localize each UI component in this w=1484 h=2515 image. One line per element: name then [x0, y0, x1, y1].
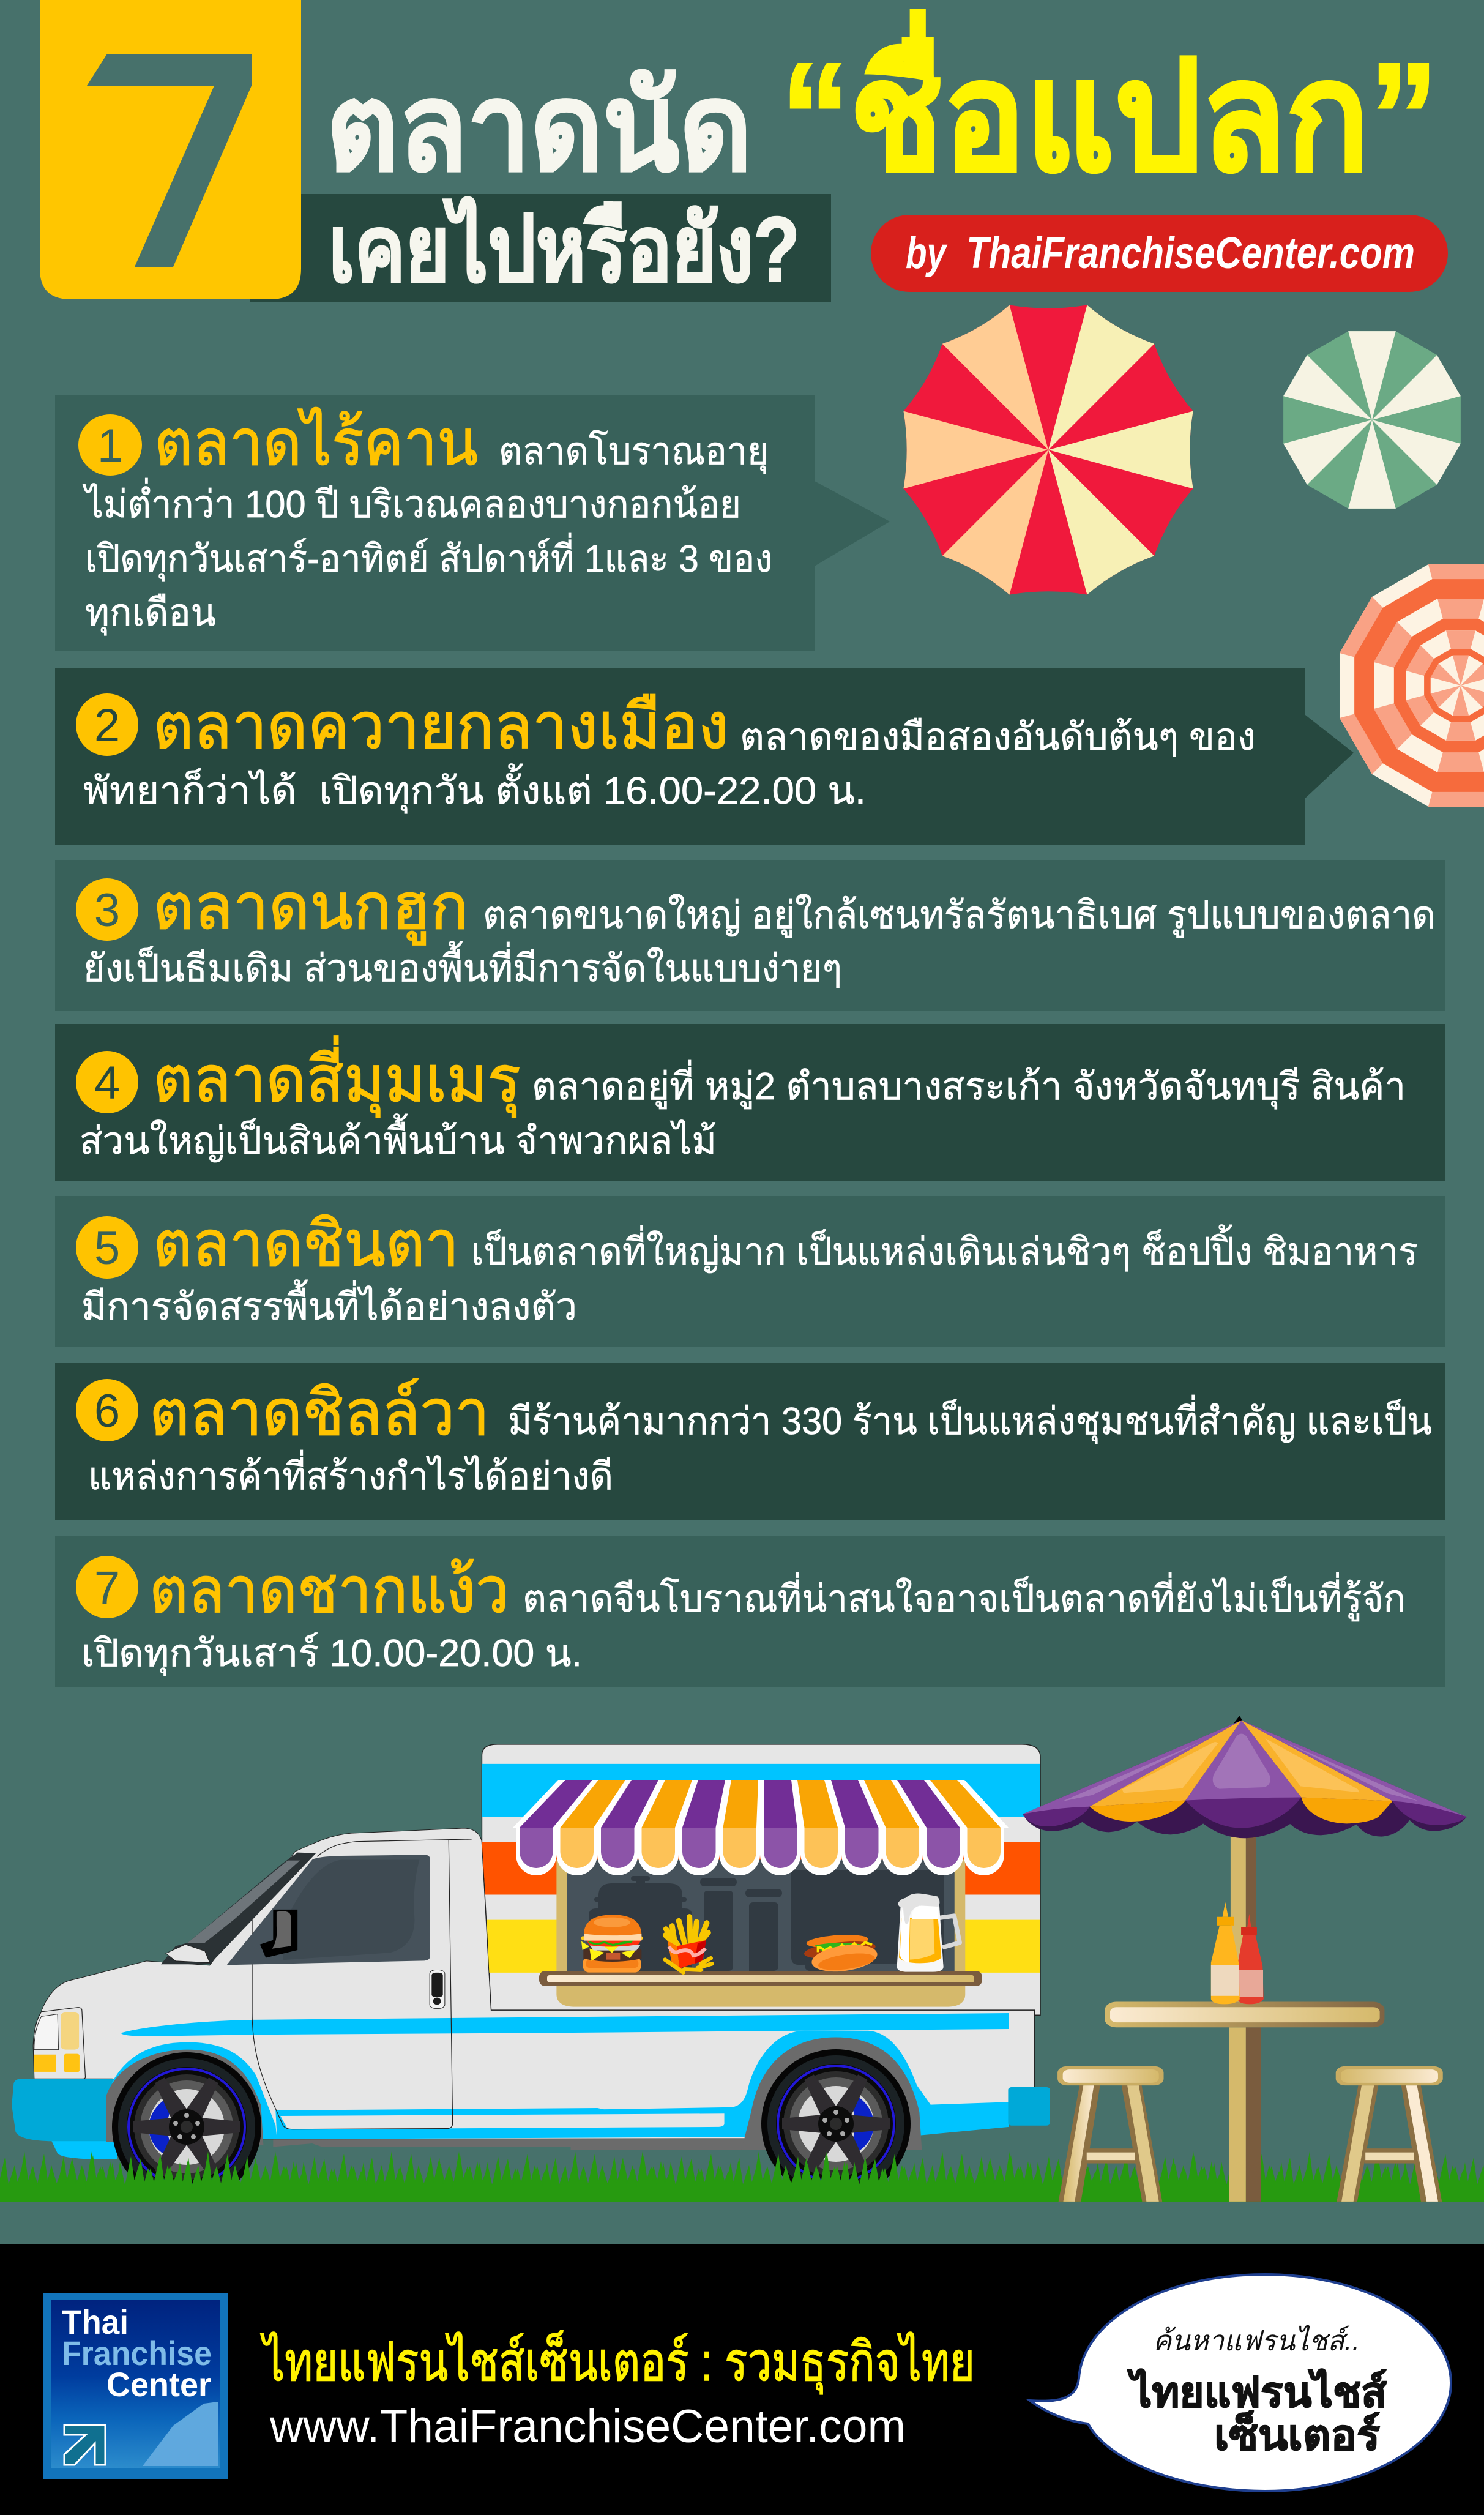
panel 3: Nok Hook market: [55, 860, 1445, 1011]
door handle: [430, 1970, 445, 2008]
body 7 line 2: เปิดทุกวันเสาร์ 10.00-20.00 น.: [81, 1632, 582, 1676]
truck body: [12, 1744, 1050, 2159]
icon: hot dog: [804, 1933, 879, 1975]
left stool: [1057, 2066, 1164, 2202]
body 1 line 2: ไม่ต่ำกว่า 100 ปี บริเวณคลองบางกอกน้อย: [82, 478, 741, 526]
windshield: [161, 1853, 316, 1964]
heading 2: ตลาดควายกลางเมือง: [153, 691, 729, 762]
number badge 3: [76, 878, 138, 941]
canopy panels: [1023, 1721, 1242, 1814]
body 6 line 2: แหล่งการค้าที่สร้างกำไรได้อย่างดี: [88, 1450, 613, 1498]
panel 6: Chill Wa market: [55, 1363, 1445, 1520]
footer url: www.ThaiFranchiseCenter.com: [269, 2401, 906, 2453]
body 4 line 1: ตลาดอยู่ที่ หมู่2 ตำบลบางสระเก้า จังหวัดจันทบุรี สินค้า: [532, 1060, 1406, 1109]
body 3 line 2: ยังเป็นธีมเดิม ส่วนของพื้นที่มีการจัดในแบบง่ายๆ: [83, 941, 842, 990]
awning: [513, 1780, 1009, 1875]
number badge 1: 1: [97, 420, 123, 472]
number badge 2: [76, 693, 138, 756]
logo word Center: Center: [106, 2365, 211, 2404]
table and stools: [1057, 1837, 1443, 2202]
box top: [482, 1744, 1040, 2015]
number badge 7: [76, 1556, 138, 1618]
heading 3: ตลาดนกฮูก: [153, 872, 469, 946]
body 4 line 2: ส่วนใหญ่เป็นสินค้าพื้นบ้าน จำพวกผลไม้: [80, 1113, 717, 1162]
body 7 line 1: ตลาดจีนโบราณที่น่าสนใจอาจเป็นตลาดที่ยังไม่เป็นที่รู้จัก: [523, 1572, 1406, 1621]
rear wheel: [761, 2049, 911, 2199]
heading 1: ตลาดไร้คาน: [154, 408, 478, 479]
number badge 6: 6: [94, 1385, 120, 1437]
icon: french fries: [665, 1917, 712, 1973]
icon: orange parasol: [1340, 564, 1484, 807]
panel 4: Si Mum Men market: [55, 1024, 1445, 1181]
byline word by: by: [906, 229, 948, 278]
panel 1: Rai Kan market: [55, 395, 890, 651]
title second line strip: [250, 194, 831, 302]
number badge 5: 5: [94, 1222, 120, 1274]
body 6 line 1: มีร้านค้ามากกว่า 330 ร้าน เป็นแหล่งชุมชนที่สำคัญ และเป็น: [508, 1395, 1432, 1444]
title block: [40, 0, 1438, 302]
scalloped underside: [1023, 1721, 1467, 1838]
icon: green parasol: [1283, 331, 1461, 509]
box stripes: [482, 1764, 1040, 1817]
title: market: ตลาดนัด: [326, 59, 752, 196]
panel 5: Chin Ta market: [55, 1196, 1445, 1347]
footer band: [0, 2244, 1484, 2515]
logo wing shape: [143, 2402, 218, 2466]
number badge 5: [76, 1216, 138, 1279]
sill trim: [275, 2107, 753, 2139]
logo word Franchise: Franchise: [62, 2334, 212, 2372]
front wheel: [112, 2052, 261, 2202]
body 1 line 4: ทุกเดือน: [85, 592, 216, 635]
icon: red sauce bottle: [1237, 1914, 1264, 2004]
logo word Thai: Thai: [62, 2303, 129, 2341]
number badge 1: [78, 414, 142, 476]
body 2 line 2: พัทยาก็ว่าได้ เปิดทุกวัน ตั้งแต่ 16.00-22.00 น.: [83, 763, 866, 813]
table top: [1105, 2002, 1384, 2027]
number badge 4: [76, 1051, 138, 1113]
number badge 3: 3: [94, 884, 120, 936]
bubble brand line 2: เซ็นเตอร์: [1214, 2410, 1380, 2459]
body 2 line 1: ตลาดของมือสองอันดับต้นๆ ของ: [740, 716, 1256, 758]
food truck illustration: [12, 1744, 1050, 2202]
panel 7: Chak Ngaeo market: [55, 1536, 1445, 1687]
body 1 line 1: ตลาดโบราณอายุ: [499, 430, 769, 474]
kitchen silhouettes: [589, 1870, 944, 1971]
patio umbrella: [1023, 1716, 1467, 1838]
body 5 line 2: มีการจัดสรรพื้นที่ได้อย่างลงตัว: [81, 1279, 577, 1328]
yellow number box: [40, 0, 301, 299]
heading 6: ตลาดชิลล์วา: [149, 1378, 490, 1449]
big number 7: [87, 54, 252, 267]
headlight: [33, 2008, 85, 2079]
serving shelf: [539, 1971, 982, 1986]
door lines: [252, 1839, 472, 2129]
icon: mustard bottle: [1211, 1902, 1240, 2004]
canopy highlights: [1122, 1742, 1218, 1793]
number badge 6: [76, 1379, 138, 1441]
front bumper: [51, 2140, 117, 2159]
icon: beer mug: [897, 1894, 960, 1972]
right stool: [1336, 2066, 1443, 2202]
umbrella tip: [1233, 1716, 1242, 1724]
heading 4: ตลาดสี่มุมเมรุ: [153, 1036, 521, 1118]
icon: burger: [581, 1915, 643, 1973]
bubble brand line 1: ไทยแฟรนไชส์: [1127, 2368, 1387, 2416]
cab shell: [42, 1828, 1034, 2139]
serving window frame: [556, 1860, 965, 2007]
grass strip: [0, 2151, 1484, 2202]
title: been there yet: เคยไปหรือยัง?: [329, 197, 800, 301]
body 1 line 3: เปิดทุกวันเสาร์-อาทิตย์ สัปดาห์ที่ 1และ 3 ของ: [85, 533, 772, 581]
door window: [227, 1855, 430, 1965]
footer headline: ไทยแฟรนไชส์เซ็นเตอร์ : รวมธุรกิจไทย: [260, 2330, 975, 2394]
panel 2: Khwai Klang Mueang market: [55, 668, 1354, 845]
side mirror: [260, 1910, 297, 1957]
rear arch and bumper: [732, 2031, 1009, 2145]
heading 5: ตลาดชินตา: [153, 1209, 459, 1280]
heading 7: ตลาดชากแง้ว: [149, 1555, 509, 1626]
bubble small text: ค้นหาแฟรนไชส์..: [1153, 2325, 1360, 2356]
number badge 2: 2: [94, 700, 120, 752]
number badge 7: 7: [94, 1562, 120, 1614]
number badge 4: 4: [94, 1057, 120, 1109]
canopy valance: [1023, 1807, 1090, 1826]
speech bubble: [1030, 2274, 1451, 2491]
body 5 line 1: เป็นตลาดที่ใหญ่มาก เป็นแหล่งเดินเล่นชิวๆ ช็อปปิ้ง ชิมอาหาร: [471, 1224, 1418, 1273]
byline pill: [871, 215, 1448, 292]
body 3 line 1: ตลาดขนาดใหญ่ อยู่ใกล้เซนทรัลรัตนาธิเบศ รูปแบบของตลาด: [483, 894, 1436, 938]
icon: red parasol: [903, 305, 1193, 595]
front wheel arch: [112, 2042, 277, 2139]
logo: [43, 2293, 228, 2479]
side stripe: [121, 2013, 1009, 2036]
table pole: [1229, 1837, 1261, 2202]
logo arrow: [64, 2425, 105, 2465]
